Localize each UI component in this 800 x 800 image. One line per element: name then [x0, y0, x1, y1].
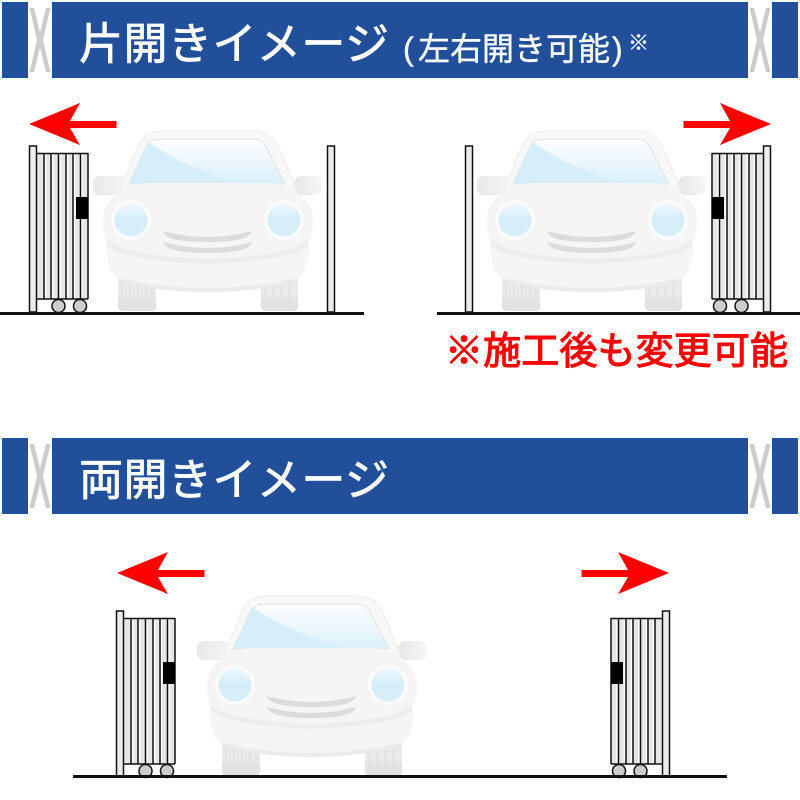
icon: left folded gate	[116, 611, 175, 778]
right gate post	[328, 146, 334, 312]
left gate post	[466, 146, 472, 312]
icon: car	[197, 596, 426, 776]
ground line	[437, 312, 800, 315]
arrow: right	[684, 103, 771, 145]
subheading: left or right opening possible: )	[612, 31, 623, 67]
panel: double-swing heading banner	[2, 438, 798, 514]
panel: double-swing gates	[73, 552, 727, 778]
icon: folded gate	[30, 146, 88, 312]
icon: car	[477, 131, 706, 311]
heading: single-swing image: 片開きイメージ	[79, 20, 389, 69]
subheading: left or right opening possible: 左右開き可能	[418, 31, 610, 67]
panel: gate opening to the left	[0, 103, 364, 315]
panel: single-swing heading banner	[2, 2, 798, 78]
panel: gate opening to the right	[437, 103, 800, 315]
ground line	[73, 775, 727, 778]
arrow: right	[582, 552, 669, 594]
icon: folded gate	[712, 146, 770, 312]
heading: double-swing image: 両開きイメージ	[79, 456, 389, 505]
callout: changeable after installation: ※施工後も変更可能	[445, 331, 788, 373]
note mark: ※	[628, 32, 649, 55]
arrow: left	[117, 552, 204, 594]
arrow: left	[29, 103, 116, 145]
icon: right folded gate	[611, 611, 670, 778]
icon: car	[93, 131, 322, 311]
subheading: left or right opening possible: (	[403, 31, 414, 67]
ground line	[0, 312, 364, 315]
